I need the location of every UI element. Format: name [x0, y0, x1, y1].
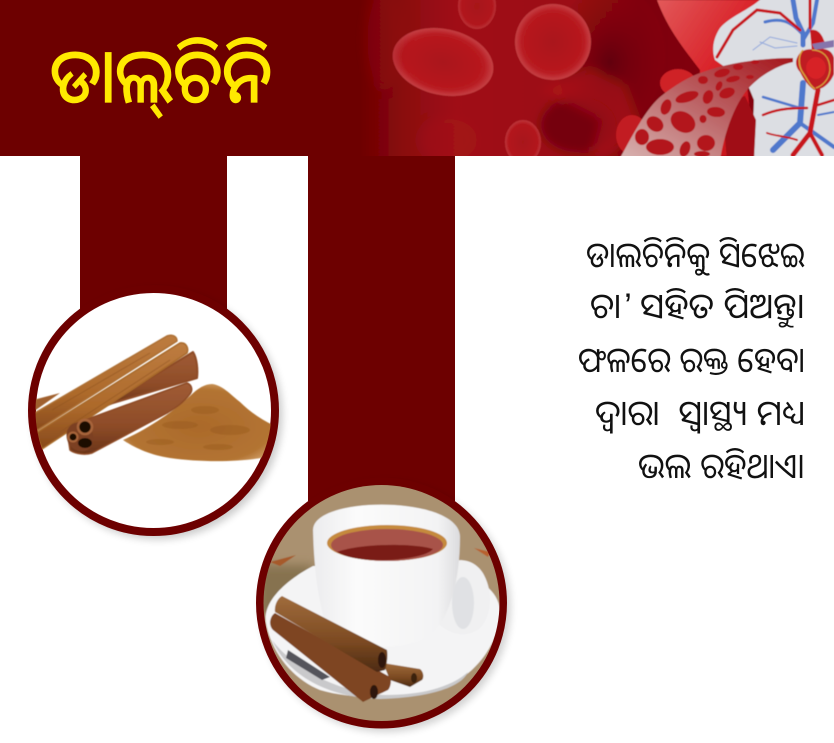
- body text: ଫଳରେ ରକ୍ତ ହେବା: [578, 341, 805, 380]
- front rolled bark: [68, 383, 192, 454]
- header band with blood cell image: [0, 0, 834, 165]
- blue veins: [753, 0, 834, 150]
- lower light stick: [36, 343, 188, 449]
- burlap background: [264, 485, 500, 721]
- back bark stick: [103, 352, 197, 407]
- body text: ଡାଲଚିନିକୁ ସିଝେଇ: [586, 236, 805, 276]
- saucer: [266, 566, 500, 697]
- title: ଡାଲ୍‌ଚିନି: [50, 35, 272, 119]
- anatomical body panel: [713, 0, 834, 160]
- left maroon column: [80, 156, 227, 311]
- circle photo: tea cup on saucer: [255, 480, 510, 732]
- heart: [796, 30, 834, 90]
- body text: ଚା’ ସହିତ ପିଅନ୍ତୁ।: [590, 287, 805, 328]
- cup handle: [458, 559, 490, 588]
- tea: [327, 525, 447, 561]
- center maroon column: [308, 156, 455, 501]
- circle photo: cinnamon sticks and powder: [32, 289, 282, 540]
- blood vessel cross section: [619, 58, 793, 160]
- cup body: [312, 504, 461, 602]
- red arteries: [717, 0, 834, 155]
- dark red lobe: [724, 96, 756, 156]
- body text: [578, 236, 805, 486]
- big red cell: [657, 0, 763, 156]
- body text: ଦ୍ୱାରା ସ୍ୱାସ୍ଥ୍ୟ ମଧ୍ୟ: [595, 394, 805, 434]
- powder pile: [123, 384, 275, 461]
- body text: ଭଲ ରହିଥାଏ।: [638, 447, 805, 486]
- spoon shadow: [286, 650, 330, 680]
- cinnamon sticks: [383, 663, 423, 687]
- blood cells: [364, 0, 591, 164]
- stick grooves: [67, 353, 170, 416]
- roll end: [66, 422, 92, 452]
- upper light stick: [33, 335, 177, 433]
